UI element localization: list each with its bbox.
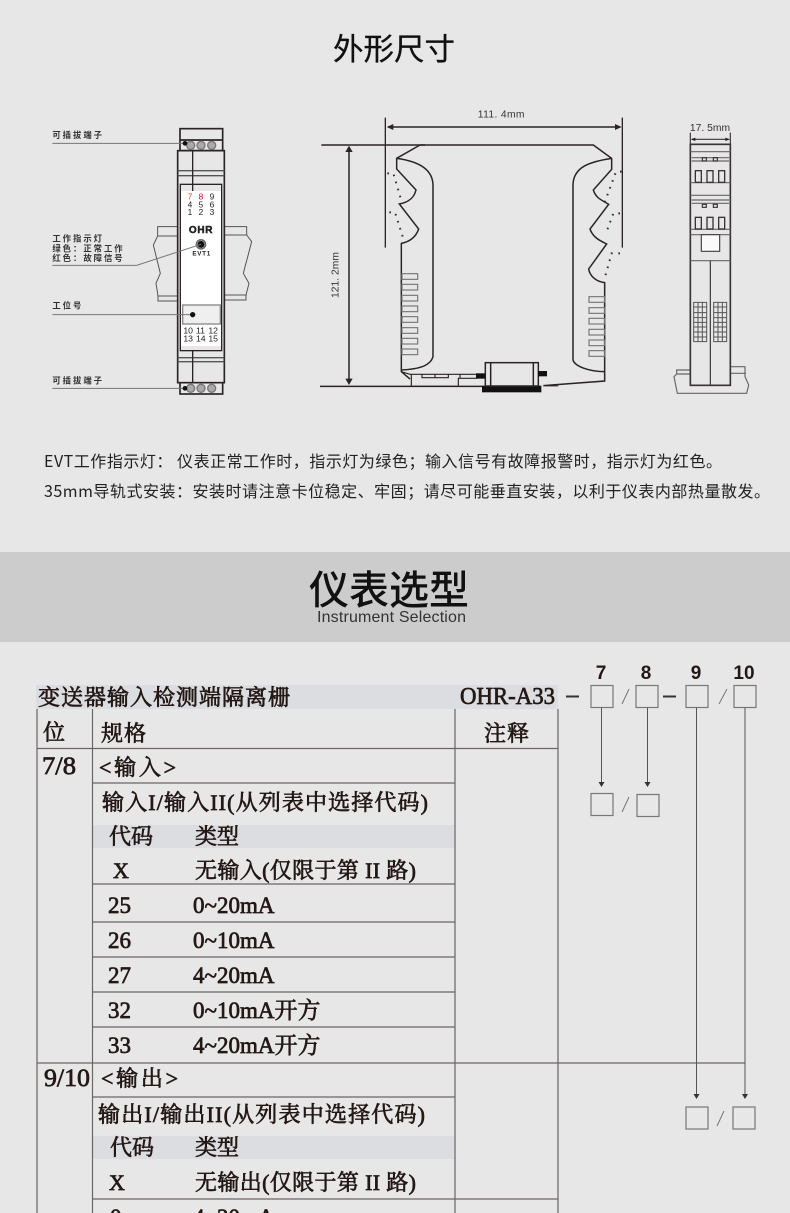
channel numbers bottom (183, 326, 218, 344)
vent slots left (402, 274, 418, 355)
height dimension 121.2mm (320, 145, 482, 386)
rows for 7/8 input: 4~20mA开方 (193, 1033, 320, 1058)
rows for 7/8 input: 27 (108, 963, 131, 988)
channel numbers top (188, 191, 215, 217)
din rail behind end view (674, 367, 749, 393)
rows for 7/8 input: 无输入(仅限于第 II 路) (195, 858, 416, 883)
code boxes (591, 686, 756, 1129)
din rail behind front view (153, 227, 252, 301)
band heading: 仪表选型 (309, 558, 469, 616)
leader lines and dots (52, 141, 201, 391)
rows for 7/8 input (42, 753, 428, 1058)
rows for 7/8 input: 0~10mA (193, 928, 275, 953)
line: DIN rail mount: 35mm导轨式安装：安装时请注意卡位稳定、牢固；请尽可能垂直安装，以利于仪表内部热量散发。 (44, 478, 770, 502)
rows for 7/8 input: 26 (108, 928, 131, 953)
vent grids (694, 302, 727, 342)
connector arrows (598, 708, 748, 1099)
rows for 7/8 input: 0~10mA开方 (193, 998, 320, 1023)
rows for 9/10 output: 类型 (195, 1135, 239, 1160)
width dimension 111.4mm: 111. 4mm (478, 110, 525, 121)
channel numbers top: 4 (188, 200, 193, 210)
model code selector (566, 663, 756, 1129)
rows for 9/10 output: <输出> (101, 1066, 178, 1091)
position numbers: 9 (691, 663, 701, 684)
position numbers: 7 (596, 663, 606, 684)
position numbers: 10 (733, 663, 755, 684)
section band: 仪表选型 (0, 552, 790, 642)
logo OHR: OHR (189, 225, 213, 236)
model name: OHR-A33 (460, 684, 555, 710)
station label box (183, 305, 220, 324)
channel numbers bottom: 10 (183, 326, 193, 336)
column header 位: 位 (43, 720, 65, 745)
table grid lines (37, 709, 745, 1213)
selection table (36, 684, 745, 1213)
rows for 7/8 input: 33 (108, 1033, 131, 1058)
rows for 7/8 input: 类型 (195, 824, 239, 849)
width dimension 17.5mm: 17. 5mm (690, 123, 730, 134)
side housing outline (397, 145, 612, 386)
diagram: front view (52, 129, 252, 394)
channel numbers bottom: 12 (208, 326, 218, 336)
rows for 7/8 input: 0~20mA (193, 893, 275, 918)
position numbers: 8 (641, 663, 651, 684)
rows for 9/10 output (44, 1065, 425, 1213)
column header 注释: 注释 (484, 721, 529, 746)
module end body (690, 144, 730, 385)
rows for 7/8 input: 7/8 (42, 753, 76, 780)
vent slots right (589, 297, 605, 356)
rows for 7/8 input: 输入I/输入II(从列表中选择代码) (102, 790, 428, 815)
channel numbers bottom: 14 (196, 334, 206, 344)
width dimension 17.5mm (690, 123, 730, 144)
channel numbers top: 5 (199, 200, 204, 210)
module body (178, 151, 224, 383)
table title: 变送器输入检测端隔离栅 (38, 685, 290, 710)
rows for 9/10 output: 无输出(仅限于第 II 路) (195, 1170, 416, 1195)
rows for 7/8 input: 32 (108, 998, 131, 1023)
terminal slots (695, 171, 725, 229)
callout labels: 可插拔端子 (52, 129, 104, 141)
channel numbers top: 1 (188, 207, 193, 217)
rows for 9/10 output: 输出I/输出II(从列表中选择代码) (98, 1102, 425, 1127)
channel numbers bottom: 13 (183, 334, 193, 344)
height dimension 121.2mm: 121. 2mm (330, 252, 341, 298)
bottom terminal (180, 383, 223, 394)
rows for 7/8 input: 代码 (109, 824, 153, 849)
callout labels: 工作指示灯 (52, 233, 104, 245)
top terminal (180, 129, 223, 151)
channel numbers top: 2 (199, 207, 204, 217)
callout labels: 红色：故障信号 (52, 252, 125, 264)
channel numbers top: 9 (210, 191, 215, 201)
dotted clip outlines (387, 172, 622, 278)
line: EVT indicator: EVT工作指示灯： 仪表正常工作时，指示灯为绿色；输入信号有故障报警时，指示灯为红色。 (44, 448, 722, 472)
rows for 9/10 output: 9/10 (44, 1065, 90, 1092)
channel numbers top: 7 (188, 191, 193, 201)
callout labels: 工位号 (52, 300, 83, 312)
rows for 7/8 input: X (113, 858, 129, 883)
column header 规格: 规格 (101, 721, 146, 746)
rows for 9/10 output: X (109, 1170, 125, 1195)
callout labels (52, 129, 125, 387)
band subtitle: Instrument Selection (317, 609, 466, 626)
position numbers (596, 663, 755, 684)
EVT1 indicator (192, 240, 211, 258)
channel numbers bottom: 11 (196, 326, 205, 336)
channel numbers bottom: 15 (208, 334, 218, 344)
din rail clip base (401, 363, 547, 392)
description text (44, 448, 770, 502)
diagram: side view with dimensions (320, 110, 622, 392)
channel numbers top: 6 (210, 200, 215, 210)
channel numbers top: 3 (210, 207, 215, 217)
rows for 7/8 input: 25 (108, 893, 131, 918)
rows for 7/8 input: <输入> (99, 755, 176, 780)
diagram: narrow end view (674, 123, 749, 393)
EVT1 indicator: EVT1 (192, 251, 211, 258)
rows for 7/8 input: 4~20mA (193, 963, 275, 988)
callout labels: 可插拔端子 (52, 375, 104, 387)
title: 外形尺寸: 外形尺寸 (333, 25, 455, 69)
white label window (701, 235, 720, 251)
table shaded rows (36, 685, 558, 1159)
channel numbers top: 8 (199, 191, 204, 201)
width dimension 111.4mm (385, 110, 622, 248)
dashes and slashes (566, 689, 727, 1126)
callout labels: 绿色：正常工作 (52, 243, 125, 255)
rows for 9/10 output: 代码 (110, 1135, 154, 1160)
